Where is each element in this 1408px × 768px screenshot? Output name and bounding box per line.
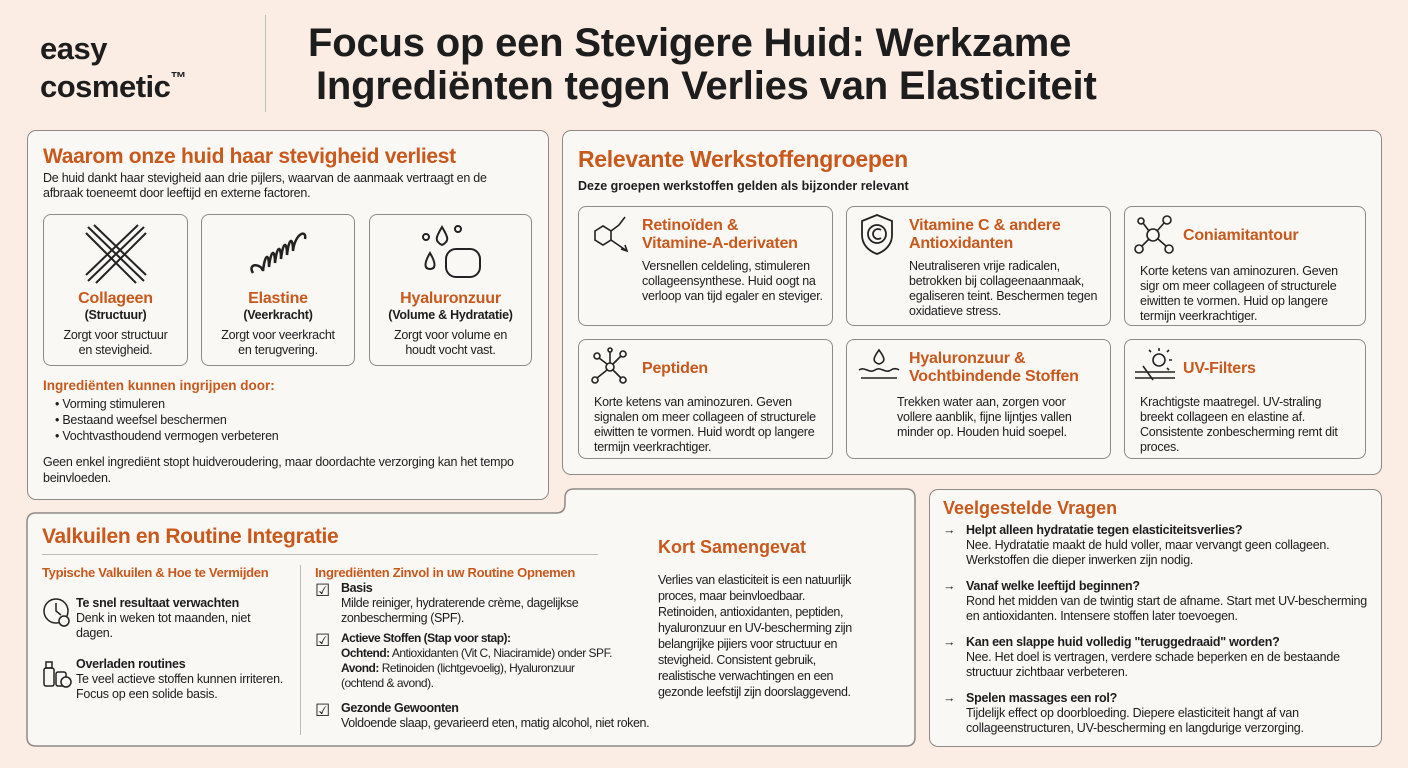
summary: proces, maar beinvloedbaar. [658, 589, 805, 603]
card: hyaluronzuur: Vochtbindende Stoffen [909, 368, 1079, 385]
card: coniamitantour: Coniamitantour [1183, 227, 1298, 244]
panel: valkuilen content [42, 525, 852, 735]
icon: spring [250, 232, 306, 274]
panel: valkuilen content: ☑ [315, 701, 330, 720]
heading: Valkuilen en Routine Integratie [42, 525, 338, 548]
card: hyaluronzuur: Hyaluronzuur & [909, 350, 1025, 367]
faq list: → [943, 691, 955, 705]
panel: valkuilen content: Overladen routines [76, 657, 185, 671]
card: vitamine c: Antioxidanten [909, 235, 1013, 252]
panel: valkuilen content: Avond: Retinoiden (lichtgevoelig), Hyaluronzuur [341, 661, 575, 675]
faq list: Vanaf welke leeftijd beginnen? [966, 579, 1140, 593]
card: peptiden [578, 339, 833, 459]
panel: valkuilen content: Te veel actieve stoffen kunnen irriteren. Focus op een solide basis. [76, 672, 283, 701]
summary: Kort Samengevat [658, 537, 806, 557]
ingredient actions [43, 378, 514, 485]
logo [40, 31, 186, 104]
icon: fibers [85, 224, 147, 284]
card: hyaluronzuur: Hyaluronzuur [400, 290, 501, 307]
summary: hyaluronzuur en UV-bescherming zijn [658, 621, 852, 635]
logo: cosmetic™ [40, 69, 186, 104]
title [308, 21, 1097, 108]
panel: waarom [27, 130, 549, 500]
faq list: Helpt alleen hydratatie tegen elasticiteitsverlies? [966, 523, 1242, 537]
heading: Waarom onze huid haar stevigheid verliest [43, 145, 456, 168]
panel: valkuilen content: Te snel resultaat verwachten [76, 596, 239, 610]
card: uv filters: UV-Filters [1183, 360, 1256, 377]
summary: stevigheid. Consistent gebruik, [658, 653, 816, 667]
summary: Verlies van elasticiteit is een natuurlijk [658, 573, 851, 587]
card: collageen: (Structuur) [85, 308, 146, 322]
faq list: Spelen massages een rol? [966, 691, 1117, 705]
summary: gezonde leefstijl zijn doorslaggevend. [658, 685, 851, 699]
panel: valkuilen content: Voldoende slaap, gevarieerd eten, matig alcohol, niet roken. [341, 716, 649, 730]
ingredient actions: Ingrediënten kunnen ingrijpen door: [43, 378, 275, 393]
card: hyaluronzuur [369, 214, 532, 366]
panel: valkuilen content: ☑ [315, 631, 330, 650]
card: hyaluronzuur [846, 339, 1111, 459]
card: vitamine c [846, 206, 1111, 326]
panel: valkuilen content: ☑ [315, 581, 330, 600]
card: collageen: Collageen [78, 290, 153, 307]
card: coniamitantour: Korte ketens van aminozuren. Geven sigr om meer collageen of structurele eiwitten te vormen. Huid op langere termijn veerkrachtiger. [1140, 264, 1338, 323]
card: vitamine c: Neutraliseren vrije radicalen, betrokken bij collageenaanmaak, egaliseren teint. Beschermen tegen oxidatieve stress. [909, 259, 1097, 318]
faq list: → [943, 579, 955, 593]
card: retinoiden [578, 206, 833, 326]
faq list: → [943, 635, 955, 649]
card: hyaluronzuur: houdt vocht vast. [405, 343, 496, 357]
card: hyaluronzuur: Trekken water aan, zorgen voor vollere aanblik, fijne lijntjes vallen minder op. Houden huid soepel. [897, 395, 1072, 439]
card: elastine [201, 214, 355, 366]
faq list: Kan een slappe huid volledig "teruggedraaid" worden? [966, 635, 1279, 649]
card: vitamine c: Vitamine C & andere [909, 217, 1061, 234]
ingredient actions: • Bestaand weefsel beschermen [55, 413, 227, 427]
card: peptiden: Korte ketens van aminozuren. Geven signalen om meer collageen of structurele eiwitten te vormen. Huid wordt op langere termijn veerkrachtiger. [594, 395, 816, 454]
icon: drops and sponge [422, 225, 481, 278]
panel: valkuilen content: Actieve Stoffen (Stap voor stap): [341, 631, 511, 645]
column: routine [315, 565, 649, 730]
heading: Relevante Werkstoffengroepen [578, 146, 908, 172]
panel: valkuilen content: Milde reiniger, hydraterende crème, dagelijkse zonbescherming (SPF). [341, 596, 578, 625]
card: uv filters: Krachtigste maatregel. UV-straling breekt collageen en elastine af. Consistente zonbescherming remt dit proces. [1140, 395, 1338, 454]
ingredient actions: Geen enkel ingrediënt stopt huidveroudering, maar doordachte verzorging kan het tempo beinvloeden. [43, 455, 514, 485]
card: collageen: en stevigheid. [79, 343, 152, 357]
card: peptiden: Peptiden [642, 360, 708, 377]
card: retinoiden: Retinoïden & [642, 217, 738, 234]
intro text: De huid dankt haar stevigheid aan drie pijlers, waarvan de aanmaak vertraagt en de afbraak toeneemt door leeftijd en externe factoren. [43, 171, 487, 200]
panel: valkuilen content: Gezonde Gewoonten [341, 701, 459, 715]
summary: realistische verwachtingen en een [658, 669, 833, 683]
summary [658, 537, 852, 699]
card: retinoiden: Vitamine-A-derivaten [642, 235, 798, 252]
panel: werkstoffen [562, 130, 1382, 475]
card: elastine: Zorgt voor veerkracht [221, 328, 335, 342]
panel: valkuilen content: (ochtend & avond). [341, 676, 433, 690]
heading: Veelgestelde Vragen [943, 498, 1117, 518]
faq list: Rond het midden van de twintig start de afname. Start met UV-bescherming en antioxidanten. Intensere stoffen later toevoegen. [966, 594, 1367, 623]
card: hyaluronzuur: (Volume & Hydratatie) [388, 308, 513, 322]
panel: valkuilen content: Ochtend: Antioxidanten (Vit C, Niaciramide) onder SPF. [341, 646, 612, 660]
card: elastine: en terugvering. [238, 343, 318, 357]
ingredient actions: • Vochtvasthoudend vermogen verbeteren [55, 429, 279, 443]
card: collageen: Zorgt voor structuur [63, 328, 168, 342]
card: elastine: (Veerkracht) [243, 308, 313, 322]
subtitle: Deze groepen werkstoffen gelden als bijzonder relevant [578, 179, 909, 193]
card: hyaluronzuur: Zorgt voor volume en [394, 328, 507, 342]
ingredient actions: • Vorming stimuleren [55, 397, 165, 411]
summary: belangrijke pijiers voor structuur en [658, 637, 837, 651]
column: valkuilen [42, 565, 283, 701]
faq list: Nee. Hydratatie maakt de huld voller, maar vervangt geen collageen. Werkstoffen die dieper inwerken zijn nodig. [966, 538, 1329, 567]
column: valkuilen: Typische Valkuilen & Hoe te Vermijden [42, 565, 268, 580]
faq list: → [943, 523, 955, 537]
faq list [943, 523, 1367, 735]
card: collageen [43, 214, 188, 366]
title: Focus op een Stevigere Huid: Werkzame [308, 21, 1071, 65]
panel: faq [929, 489, 1382, 747]
card: retinoiden: Versnellen celdeling, stimuleren collageensynthese. Huid oogt na verloop van tijd egaler en steviger. [642, 259, 823, 303]
panel: valkuilen content: Basis [341, 581, 372, 595]
column: routine: Ingrediënten Zinvol in uw Routine Opnemen [315, 565, 575, 580]
panel: valkuilen content: Denk in weken tot maanden, niet dagen. [76, 611, 250, 640]
faq list: Tijdelijk effect op doorbloeding. Diepere elasticiteit hangt af van collageenstructuren, UV-bescherming en langdurige verzorging. [966, 706, 1304, 735]
summary: Retinoiden, antioxidanten, peptiden, [658, 605, 843, 619]
logo: easy [40, 31, 107, 66]
card: elastine: Elastine [248, 290, 308, 307]
card: coniamitantour [1124, 206, 1366, 326]
faq list: Nee. Het doel is vertragen, verdere schade beperken en de bestaande structuur zichtbaar verbeteren. [966, 650, 1340, 679]
title: Ingrediënten tegen Verlies van Elasticiteit [316, 64, 1097, 108]
card: uv filters [1124, 339, 1366, 459]
